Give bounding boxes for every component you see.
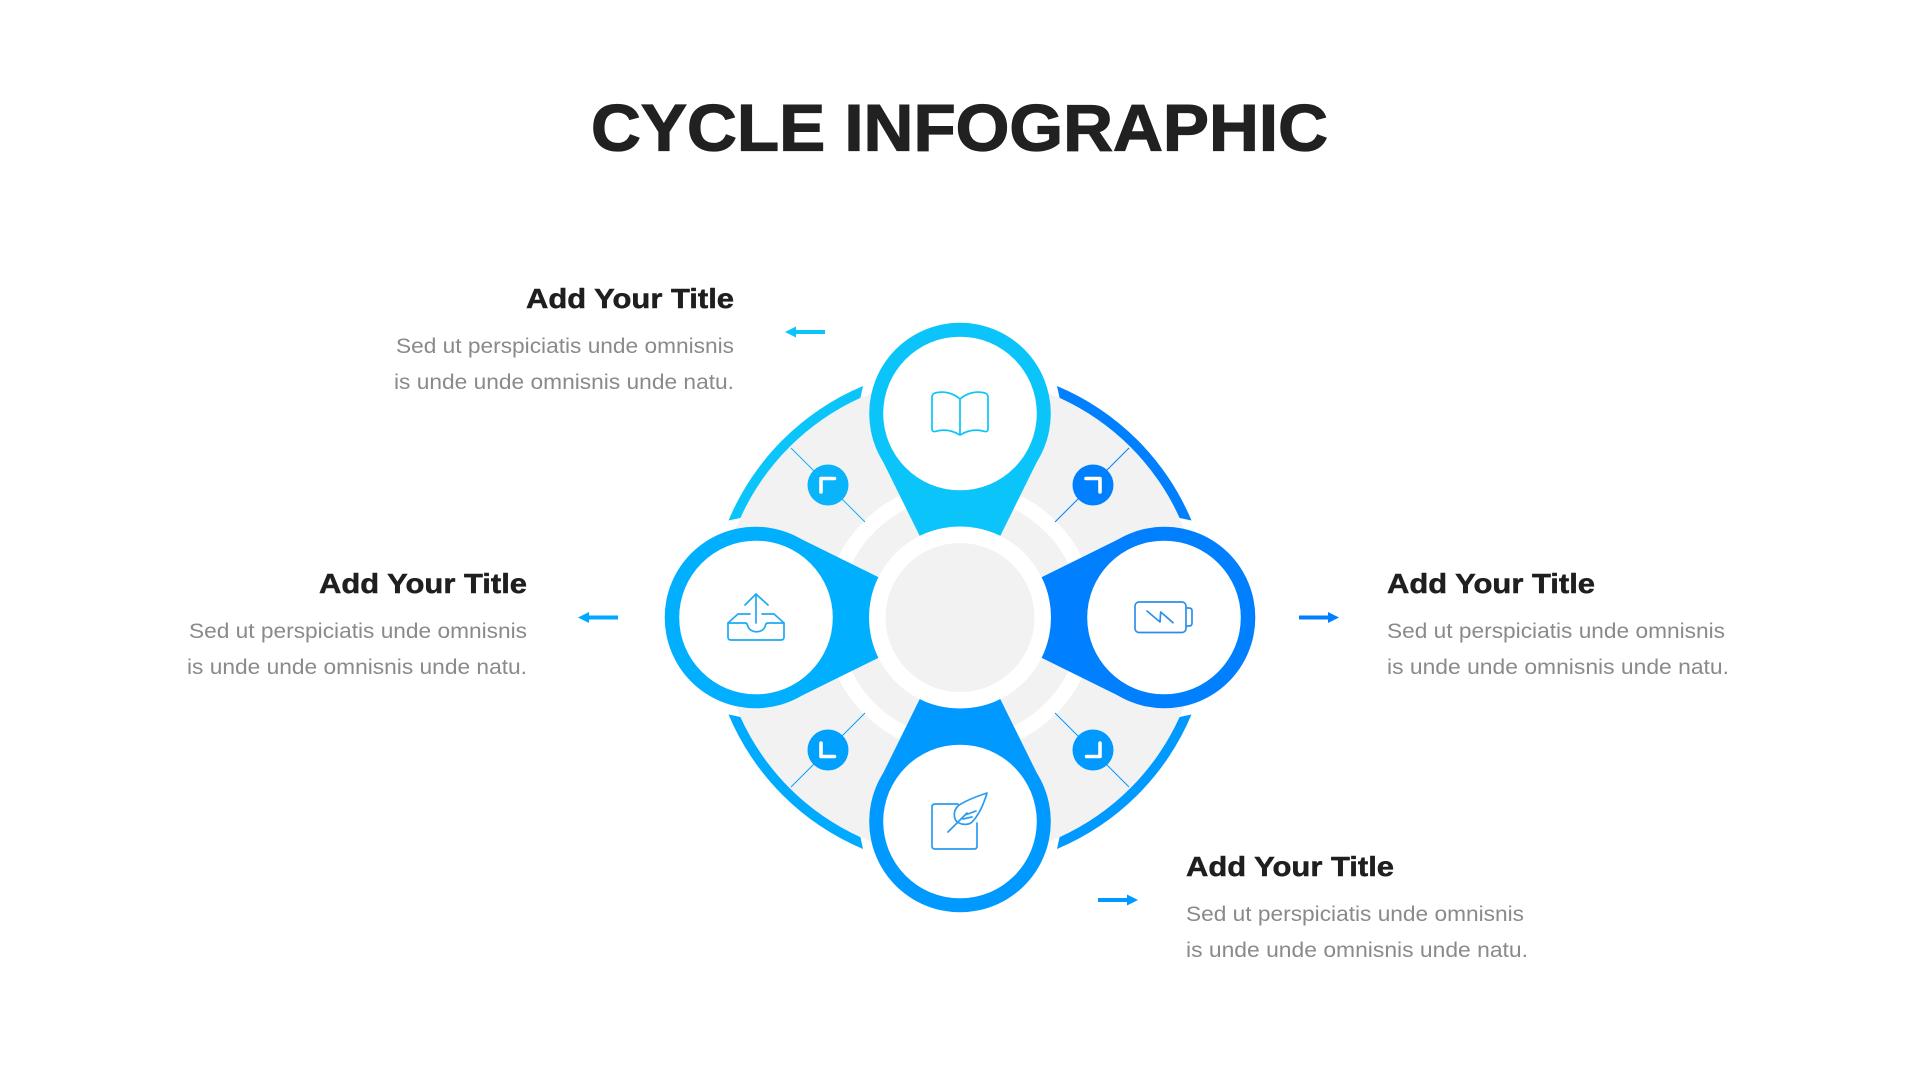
cycle diagram — [665, 323, 1255, 912]
text block: top left: Sed ut perspiciatis unde omnisnis — [396, 334, 734, 358]
text block: right: Sed ut perspiciatis unde omnisnis — [1387, 619, 1725, 643]
text block: top left — [394, 283, 734, 394]
center hub — [869, 526, 1051, 708]
arrow: bottom right — [1098, 894, 1138, 906]
text block: right: Add Your Title — [1387, 568, 1595, 599]
text block: left: Sed ut perspiciatis unde omnisnis — [189, 619, 527, 643]
text block: top left: is unde unde omnisnis unde natu. — [394, 370, 734, 394]
icon: inbox upload — [728, 594, 784, 640]
outer arc: top right — [1057, 386, 1192, 520]
pin: right — [960, 527, 1255, 708]
text block: left — [187, 568, 527, 679]
text block: right — [1387, 568, 1729, 679]
connector: top left — [791, 448, 865, 522]
icon: book — [932, 392, 988, 435]
connector: bottom left — [791, 713, 865, 787]
title: CYCLE INFOGRAPHIC — [591, 90, 1328, 164]
text block: left: is unde unde omnisnis unde natu. — [187, 655, 527, 679]
text block: right: is unde unde omnisnis unde natu. — [1387, 655, 1729, 679]
icon: note and feather — [932, 793, 987, 849]
pin: top — [869, 323, 1051, 618]
connector: top right — [1055, 448, 1129, 522]
outer arc: top left — [728, 386, 863, 520]
arrow: right — [1299, 612, 1339, 623]
text block: top left: Add Your Title — [526, 283, 734, 314]
icon: battery — [1135, 602, 1192, 632]
text block: bottom right — [1186, 851, 1528, 962]
pin: bottom — [869, 618, 1051, 912]
connector: bottom right — [1055, 713, 1129, 787]
text block: bottom right: Add Your Title — [1186, 851, 1394, 882]
outer arc: bottom right — [1057, 714, 1192, 849]
outer arc: bottom left — [728, 714, 863, 849]
arrow: top left — [785, 326, 825, 338]
text block: bottom right: Sed ut perspiciatis unde omnisnis — [1186, 902, 1524, 926]
text block: left: Add Your Title — [319, 568, 527, 599]
pin: left — [665, 527, 960, 708]
text block: bottom right: is unde unde omnisnis unde natu. — [1186, 938, 1528, 962]
background disc — [719, 376, 1201, 858]
arrow: left — [578, 612, 618, 623]
